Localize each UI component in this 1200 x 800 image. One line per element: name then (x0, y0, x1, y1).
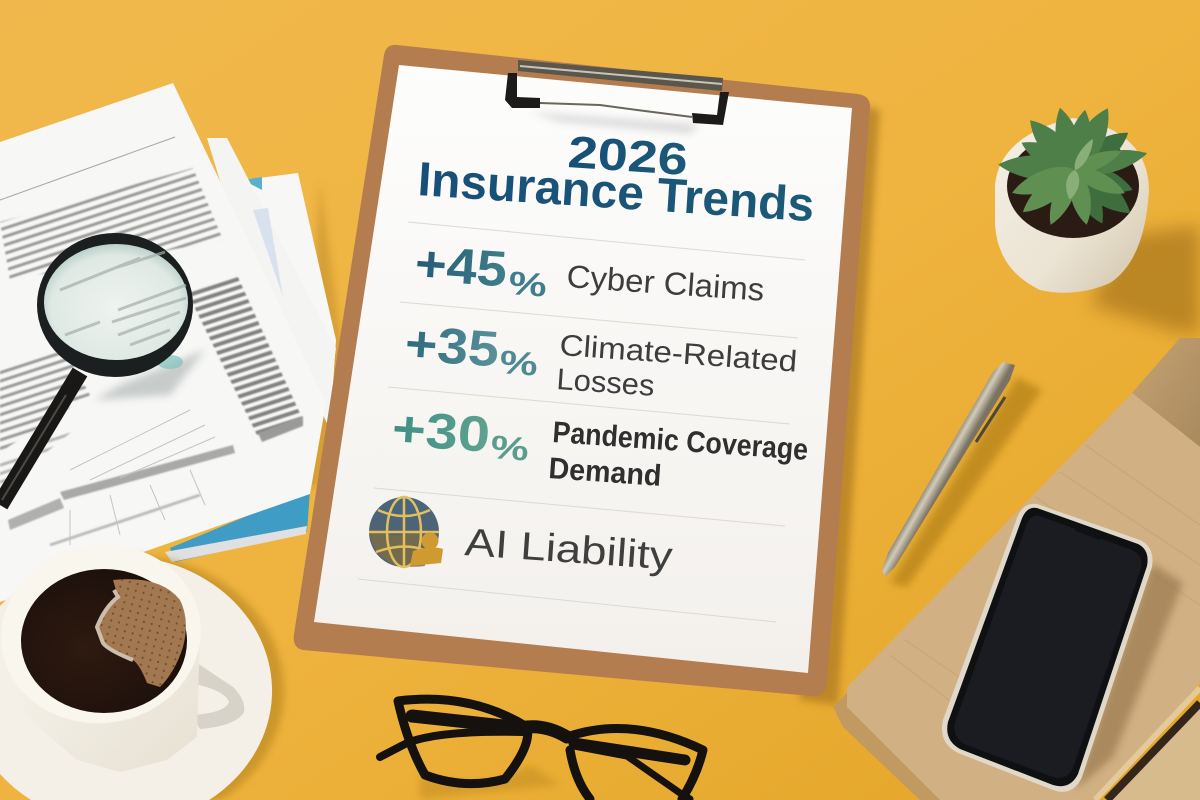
plant pot (995, 118, 1149, 293)
papers stack (0, 83, 345, 602)
document text lines (0, 137, 303, 545)
trend row: pandemic coverage demand (390, 400, 809, 493)
shadow: phone (1075, 563, 1183, 790)
notebook spine and page (1107, 703, 1200, 800)
trend row: cyber claims: Cyber Claims (566, 258, 766, 308)
trend row: AI liability (369, 497, 674, 579)
left temple arm (412, 716, 523, 728)
notebook (833, 338, 1200, 800)
trend row: climate-related losses: +35 (403, 315, 501, 378)
trend row: pandemic coverage demand: Demand (548, 452, 663, 493)
smartphone (942, 504, 1152, 792)
bridge (527, 727, 567, 737)
saucer (0, 556, 284, 800)
soil (1007, 134, 1139, 238)
left lens frame (398, 699, 528, 784)
coffee cup (0, 532, 244, 772)
glasses (380, 699, 703, 799)
right lens frame (567, 729, 703, 799)
clipboard (294, 45, 870, 696)
icon: globe with person (369, 497, 443, 567)
trend row: climate-related losses: Losses (556, 363, 656, 403)
plant (995, 102, 1200, 335)
trend row: pandemic coverage demand: Pandemic Coverage (552, 416, 809, 467)
trend row: pandemic coverage demand: +30 (390, 400, 492, 463)
pen (882, 362, 1042, 587)
trend row: pandemic coverage demand: % (490, 428, 530, 468)
title: Insurance Trends (416, 153, 816, 232)
trend row: climate-related losses: % (499, 343, 539, 383)
trend row: cyber claims: % (508, 264, 548, 304)
trend row: cyber claims: +45 (413, 235, 509, 297)
trend row: cyber claims (413, 235, 766, 308)
trend row: climate-related losses (403, 315, 798, 403)
magnifying glass (0, 233, 205, 505)
trend row: climate-related losses: Climate-Related (559, 329, 798, 379)
table grid lines (70, 410, 215, 545)
shadow: clipboard (800, 100, 880, 705)
clipboard sheet: infographic panel (314, 65, 852, 673)
clipboard clip (505, 60, 729, 134)
succulent leaves (997, 102, 1149, 229)
title: 2026 (566, 126, 689, 185)
trend row: AI liability: AI Liability (463, 521, 674, 579)
